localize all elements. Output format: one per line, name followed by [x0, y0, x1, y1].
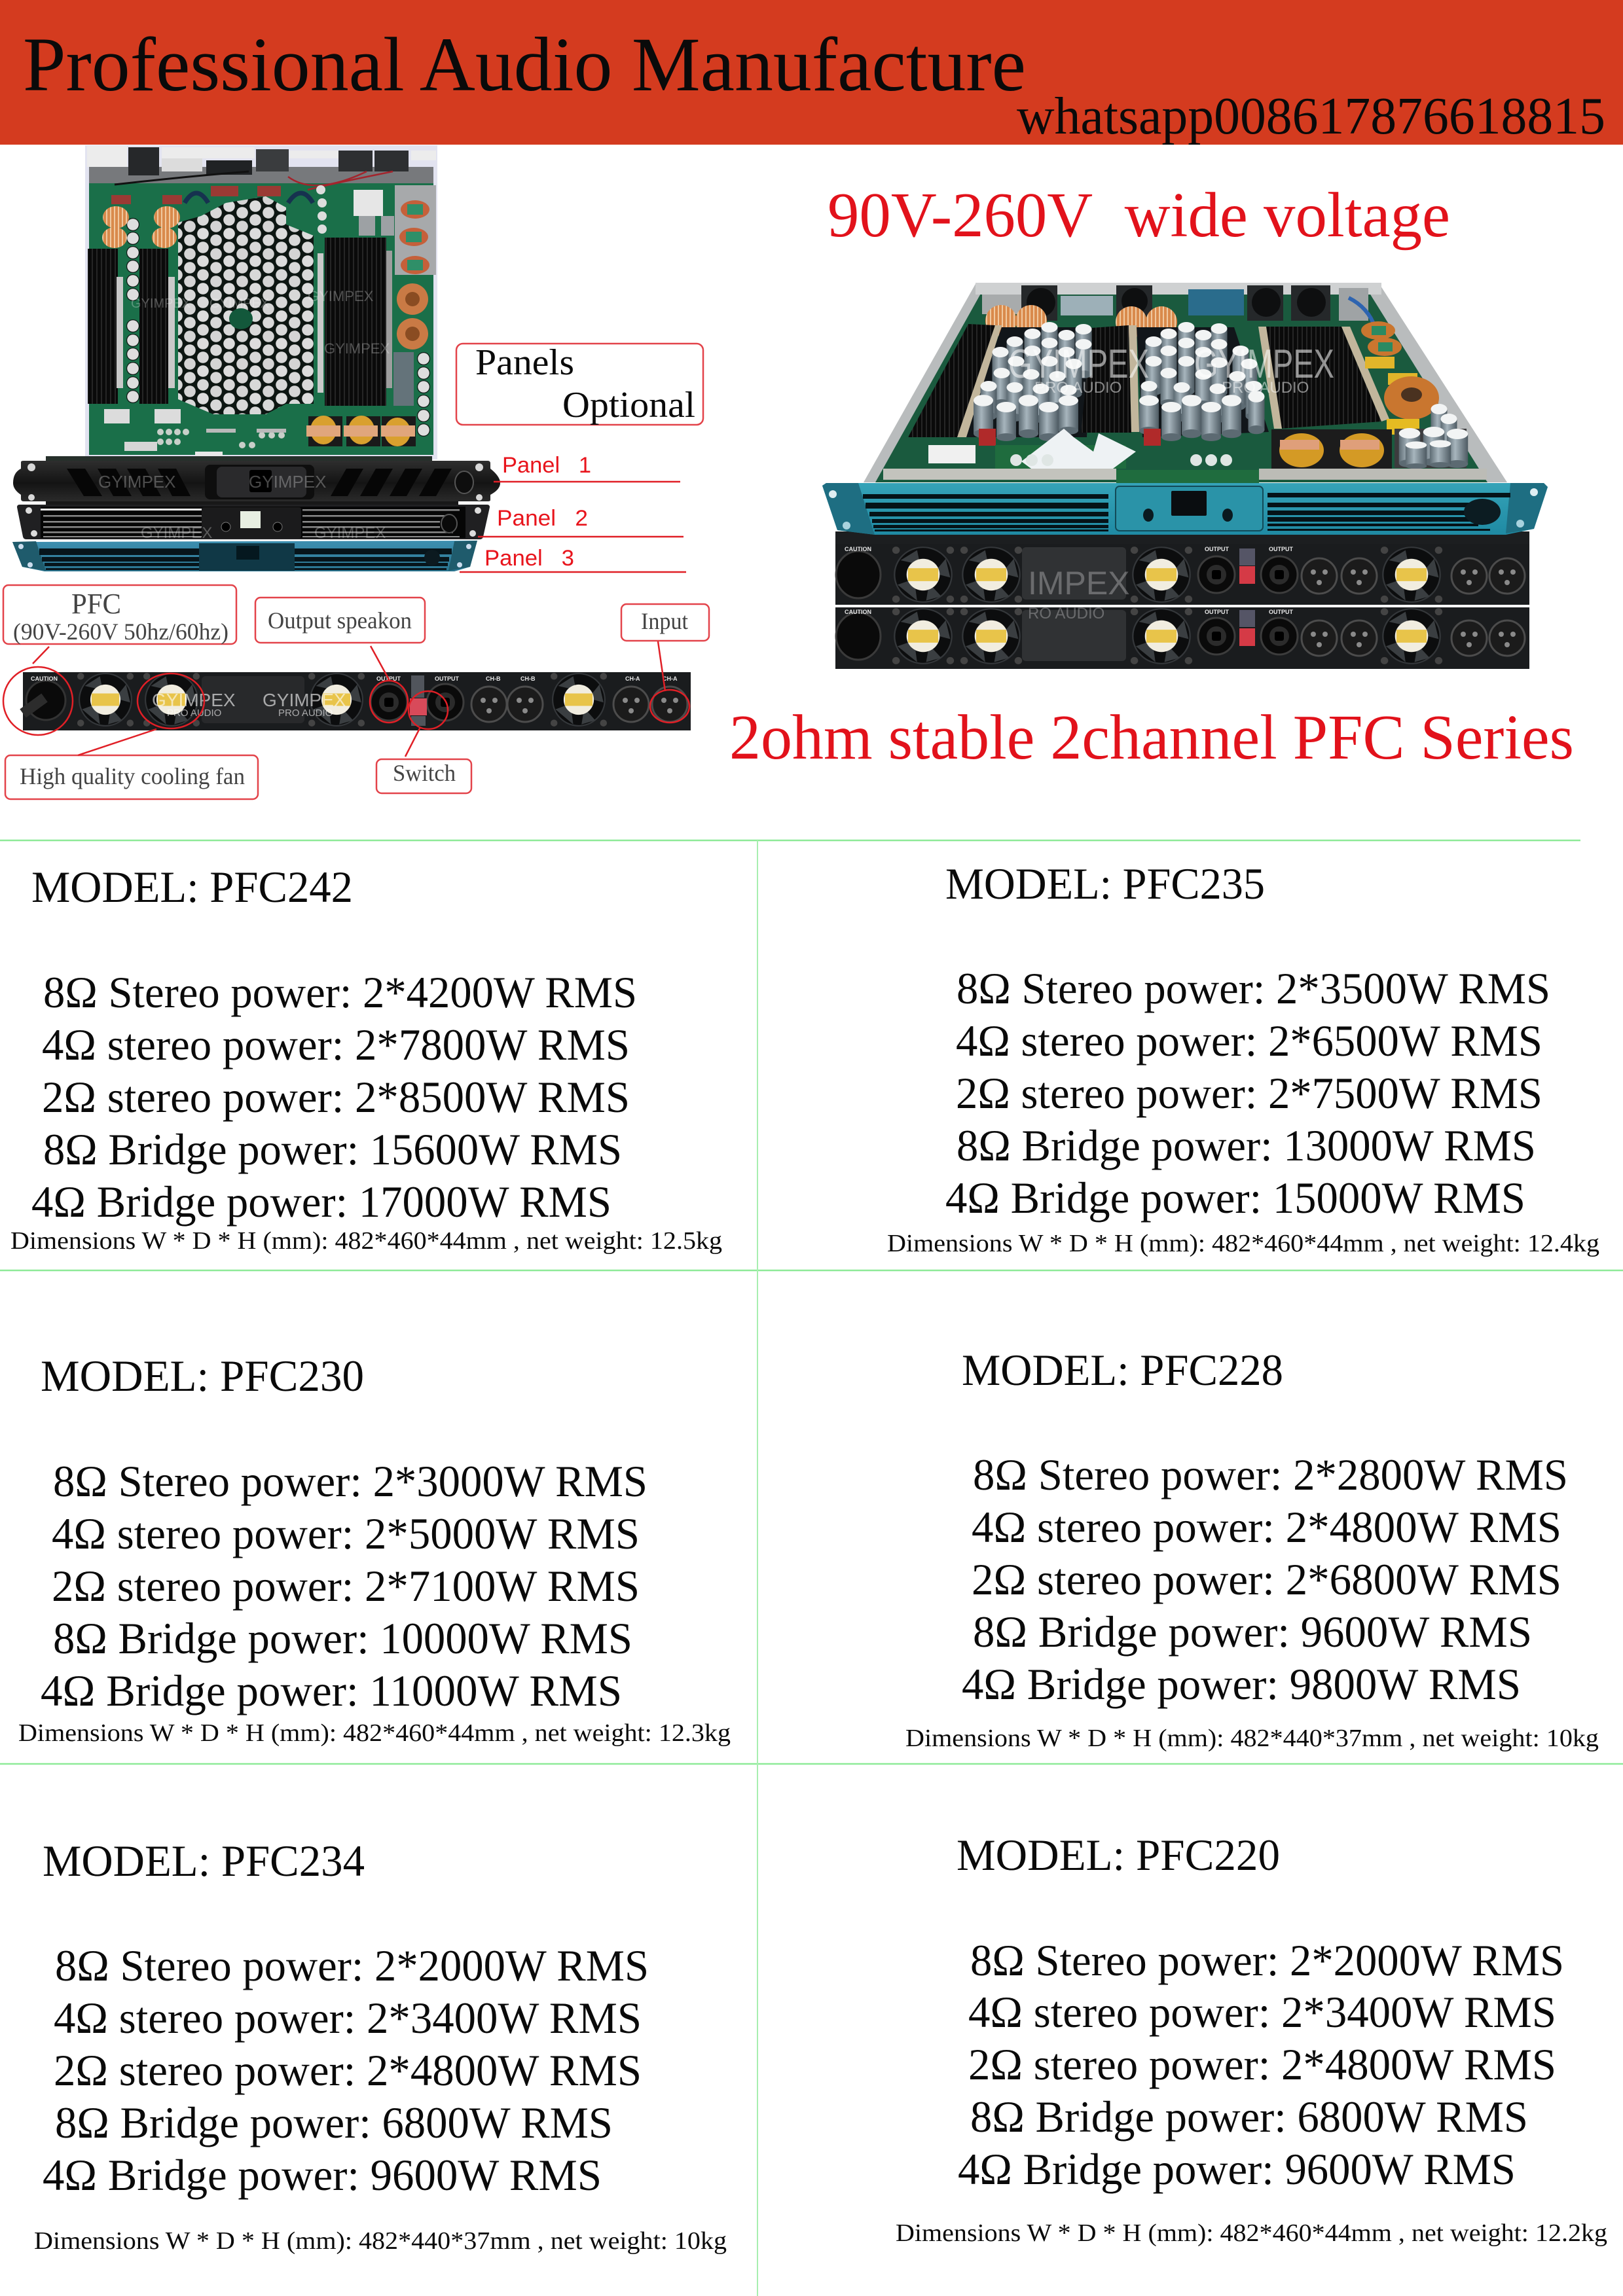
spec block: PFC242: 2Ω stereo power: 2*8500W RMS [42, 1072, 630, 1122]
spec block: PFC220: MODEL: PFC220 [957, 1830, 1280, 1880]
spec block: PFC242: 8Ω Bridge power: 15600W RMS [43, 1124, 622, 1174]
photo: amplifier rear panel: CH-B [520, 675, 536, 682]
label: panel 1: Panel 1 [502, 453, 591, 478]
spec block: PFC235: MODEL: PFC235 [945, 859, 1265, 908]
panel option 1: black curved front panel [13, 456, 500, 501]
callout: input [621, 604, 709, 723]
spec block: PFC235: Dimensions W * D * H (mm): 482*460*44mm , net weight: 12.4kg [887, 1230, 1599, 1257]
spec block: PFC230: Dimensions W * D * H (mm): 482*460*44mm , net weight: 12.3kg [18, 1719, 731, 1747]
label: panel 3: Panel 3 [484, 546, 574, 571]
panel option 2: black slim front panel: GYIMPEX [314, 524, 386, 542]
rear panel stack: CAUTION [845, 609, 871, 615]
callout: switch: Switch [393, 760, 456, 786]
whatsapp contact: whatsapp008617876618815 [1017, 88, 1605, 145]
photo: amplifier stack, perspective view: PRO AUDIO [1222, 379, 1309, 397]
spec block: PFC230 [18, 1351, 731, 1747]
spec block: PFC242: 8Ω Stereo power: 2*4200W RMS [43, 967, 637, 1017]
spec block: PFC228: MODEL: PFC228 [962, 1345, 1283, 1395]
teal front panel [822, 483, 1548, 535]
photo: amplifier interior, top view: GYIMPEX [131, 296, 191, 311]
callout: input: Input [641, 608, 688, 634]
spec block: PFC220 [896, 1830, 1607, 2247]
spec block: PFC234 [34, 1836, 727, 2255]
capacitors [974, 322, 1265, 441]
spec block: PFC228: Dimensions W * D * H (mm): 482*440*37mm , net weight: 10kg [905, 1725, 1599, 1752]
spec block: PFC220: 8Ω Bridge power: 6800W RMS [970, 2092, 1528, 2142]
spec block: PFC220: 4Ω Bridge power: 9600W RMS [958, 2144, 1516, 2194]
panel option 1: black curved front panel: GYIMPEX [249, 472, 326, 492]
photo: amplifier rear panel: CH-A [663, 675, 678, 682]
callout: output speakon: Output speakon [268, 607, 412, 634]
photo: amplifier rear panel: OUTPUT [435, 675, 460, 682]
photo: amplifier stack, perspective view [822, 283, 1548, 669]
spec block: PFC242 [10, 862, 722, 1255]
label: panel 2: Panel 2 [497, 506, 588, 531]
spec block: PFC228: 4Ω Bridge power: 9800W RMS [962, 1659, 1521, 1709]
callout: panels optional: Optional [562, 385, 695, 425]
panel option 2: black slim front panel: GYIMPEX [141, 524, 212, 542]
photo: amplifier interior, top view: GYIMPEX [324, 340, 390, 357]
spec block: PFC242: 4Ω stereo power: 2*7800W RMS [42, 1020, 630, 1069]
photo: amplifier rear panel: PRO AUDIO [278, 708, 333, 719]
title: Professional Audio Manufacture [23, 22, 1026, 107]
spec block: PFC230: 8Ω Stereo power: 2*3000W RMS [53, 1456, 647, 1506]
spec block: PFC228 [905, 1345, 1599, 1752]
heading: product series: 2ohm stable 2channel PFC Series [729, 702, 1574, 772]
spec block: PFC230: 4Ω stereo power: 2*5000W RMS [52, 1509, 640, 1558]
spec block: PFC220: 4Ω stereo power: 2*3400W RMS [968, 1987, 1556, 2037]
spec block: PFC235: 4Ω Bridge power: 15000W RMS [945, 1173, 1525, 1223]
rear panel stack: OUTPUT [1269, 609, 1294, 615]
spec block: PFC230: 8Ω Bridge power: 10000W RMS [53, 1613, 632, 1663]
spec block: PFC228: 4Ω stereo power: 2*4800W RMS [972, 1502, 1561, 1552]
rear panel stack: CAUTION [845, 546, 871, 552]
callout: PFC: (90V-260V 50hz/60hz) [13, 619, 228, 645]
callout: PFC [3, 585, 236, 735]
spec block: PFC230: MODEL: PFC230 [41, 1351, 364, 1401]
spec block: PFC234: 2Ω stereo power: 2*4800W RMS [54, 2045, 642, 2095]
spec block: PFC228: 2Ω stereo power: 2*6800W RMS [972, 1554, 1561, 1604]
callout: switch [376, 691, 471, 793]
spec block: PFC235 [887, 859, 1599, 1257]
photo: amplifier stack, perspective view: GYIMPEX [1194, 342, 1334, 387]
panel option 2: black slim front panel [17, 501, 490, 542]
photo: amplifier rear panel: GYIMPEX [263, 690, 346, 710]
photo: amplifier rear panel: PRO AUDIO [167, 708, 221, 719]
spec block: PFC230: 2Ω stereo power: 2*7100W RMS [52, 1561, 640, 1611]
rear panel stack: OUTPUT [1205, 609, 1230, 615]
spec block: PFC234: 8Ω Bridge power: 6800W RMS [55, 2098, 613, 2147]
spec block: PFC234: MODEL: PFC234 [43, 1836, 365, 1886]
spec block: PFC234: 8Ω Stereo power: 2*2000W RMS [55, 1941, 649, 1990]
callout: cooling fan: High quality cooling fan [20, 763, 245, 789]
callout: PFC: PFC [71, 588, 121, 620]
spec block: PFC230: 4Ω Bridge power: 11000W RMS [41, 1666, 622, 1715]
photo: amplifier interior, top view: GYIMPEX [210, 296, 269, 311]
photo: amplifier stack, perspective view: PRO AUDIO [1034, 379, 1122, 397]
spec block: PFC235: 4Ω stereo power: 2*6500W RMS [956, 1016, 1542, 1066]
spec block: PFC234: 4Ω stereo power: 2*3400W RMS [54, 1993, 642, 2043]
photo: amplifier rear panel: OUTPUT [376, 675, 401, 682]
spec block: PFC234: 4Ω Bridge power: 9600W RMS [43, 2150, 602, 2200]
spec block: PFC228: 8Ω Bridge power: 9600W RMS [973, 1607, 1532, 1657]
chassis interior [864, 283, 1507, 483]
photo: amplifier rear panel: CH-B [486, 675, 501, 682]
rear panel stack [835, 531, 1529, 669]
callout: panels optional: Panels [475, 342, 574, 383]
capacitor bank [178, 196, 314, 414]
spec block: PFC228: 8Ω Stereo power: 2*2800W RMS [973, 1450, 1568, 1499]
spec block: PFC220: 2Ω stereo power: 2*4800W RMS [968, 2039, 1556, 2089]
spec block: PFC220: 8Ω Stereo power: 2*2000W RMS [970, 1935, 1564, 1985]
spec block: PFC235: 8Ω Stereo power: 2*3500W RMS [957, 963, 1550, 1013]
header banner [0, 0, 1623, 145]
table grid lines [0, 840, 1623, 2296]
spec block: PFC242: MODEL: PFC242 [31, 862, 353, 912]
photo: amplifier interior, top view [85, 145, 437, 461]
callout: output speakon [255, 598, 425, 723]
callout: cooling fan [5, 673, 258, 799]
rear panel stack: OUTPUT [1205, 546, 1230, 552]
rear panel stack: IMPEX [1028, 565, 1130, 601]
photo: amplifier rear panel [23, 672, 691, 730]
photo: amplifier stack, perspective view: GYIMPEX [1008, 342, 1149, 387]
photo: amplifier interior, top view: GYIMPEX [308, 288, 374, 304]
heading: wide voltage: 90V-260V wide voltage [828, 180, 1450, 250]
panel option 3: teal front panel [12, 541, 477, 571]
callout: panels optional [456, 342, 703, 425]
photo: amplifier rear panel: GYIMPEX [152, 690, 236, 710]
rear panel stack: OUTPUT [1269, 546, 1294, 552]
photo: amplifier rear panel: CAUTION [31, 675, 58, 682]
rear panel stack: RO AUDIO [1028, 605, 1104, 622]
spec block: PFC242: Dimensions W * D * H (mm): 482*460*44mm , net weight: 12.5kg [10, 1227, 722, 1255]
spec block: PFC234: Dimensions W * D * H (mm): 482*440*37mm , net weight: 10kg [34, 2227, 727, 2255]
spec block: PFC220: Dimensions W * D * H (mm): 482*460*44mm , net weight: 12.2kg [896, 2219, 1607, 2247]
spec block: PFC235: 8Ω Bridge power: 13000W RMS [957, 1121, 1536, 1170]
photo: amplifier rear panel: CH-A [625, 675, 640, 682]
panel option 1: black curved front panel: GYIMPEX [98, 472, 175, 492]
spec block: PFC235: 2Ω stereo power: 2*7500W RMS [956, 1068, 1542, 1118]
spec block: PFC242: 4Ω Bridge power: 17000W RMS [31, 1177, 611, 1227]
